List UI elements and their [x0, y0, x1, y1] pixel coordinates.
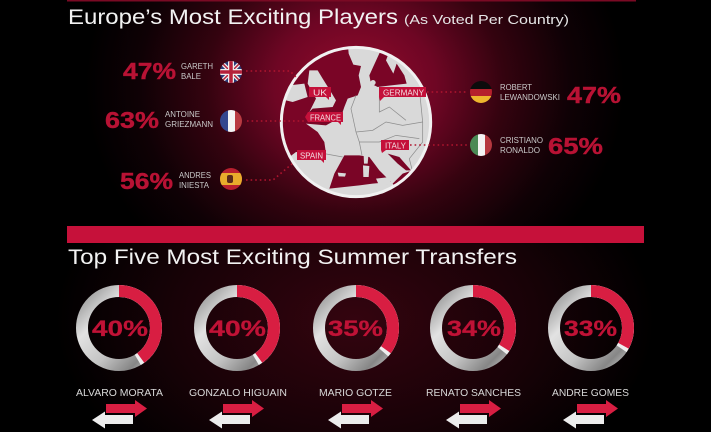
player: Antoine Griezmann: 63%	[105, 107, 159, 133]
donut: Andre Gomes 33%	[554, 291, 628, 365]
icon: Spain flag	[220, 168, 242, 190]
player: Robert Lewandowski: 47%	[567, 82, 621, 108]
donut: Mario Gotze 35%: 35%	[328, 316, 383, 341]
label: France: FRANCE	[310, 112, 341, 122]
arrows: transfer	[209, 400, 264, 428]
label: UK: UK	[313, 88, 327, 98]
label: UK	[309, 87, 331, 100]
title: Europe's most exciting players	[68, 6, 569, 29]
arrows: transfer	[328, 400, 383, 428]
donut: Alvaro Morata 40%	[82, 291, 156, 365]
donut: Gonzalo Higuain 40%	[200, 291, 274, 365]
title: top five transfers: Top Five Most Exciting Summer Transfers	[68, 246, 517, 269]
title: Europe's most exciting players: Europe’s Most Exciting Players	[68, 6, 398, 29]
connector lines	[246, 71, 468, 180]
player: Antoine Griezmann	[105, 107, 213, 133]
player: Antoine Griezmann: ANTOINE	[165, 110, 200, 119]
player: Cristiano Ronaldo: CRISTIANO	[500, 136, 543, 145]
player: Antoine Griezmann: GRIEZMANN	[165, 120, 213, 129]
player: Robert Lewandowski: LEWANDOWSKI	[500, 93, 560, 102]
background panel: bottom	[0, 243, 711, 432]
label: Germany: GERMANY	[383, 88, 424, 98]
top edge strip	[67, 0, 636, 2]
player: Cristiano Ronaldo	[500, 133, 603, 159]
player: Andres Iniesta: INIESTA	[179, 181, 210, 190]
icon: France flag	[220, 110, 242, 132]
label: Spain: SPAIN	[300, 150, 323, 160]
icon: Italy flag	[470, 134, 492, 156]
player: Cristiano Ronaldo: 65%	[548, 133, 603, 159]
donut: Andre Gomes 33%: 33%	[564, 316, 617, 341]
player: Gareth Bale: 47%	[123, 58, 176, 84]
label: Spain	[297, 150, 326, 163]
name: Andre Gomes: ANDRE GOMES	[552, 387, 629, 399]
name: Renato Sanches: RENATO SANCHES	[426, 387, 521, 399]
name: Gonzalo Higuain: GONZALO HIGUAIN	[189, 387, 287, 399]
player: Andres Iniesta: ANDRES	[179, 171, 211, 180]
player: Andres Iniesta	[120, 168, 211, 194]
player: Andres Iniesta: 56%	[120, 168, 173, 194]
label: Italy: ITALY	[385, 140, 406, 150]
label: Germany	[379, 87, 426, 101]
label: France	[305, 112, 343, 125]
donut: Alvaro Morata 40%: 40%	[92, 316, 148, 341]
donut: Renato Sanches 34%	[436, 291, 510, 365]
player: Gareth Bale	[123, 58, 213, 84]
arrows: transfer	[563, 400, 618, 428]
player: Gareth Bale: GARETH	[181, 62, 213, 71]
title: Europe's most exciting players: (As Voted Per Country)	[404, 12, 569, 27]
donut: Gonzalo Higuain 40%: 40%	[209, 316, 266, 341]
name: Alvaro Morata: ALVARO MORATA	[76, 387, 163, 399]
arrows: transfer	[446, 400, 501, 428]
name: Mario Gotze: MARIO GOTZE	[319, 387, 392, 399]
player: Robert Lewandowski: ROBERT	[500, 83, 532, 92]
donut: Renato Sanches 34%: 34%	[447, 316, 501, 341]
player: Gareth Bale: BALE	[181, 72, 201, 81]
arrows: transfer	[92, 400, 147, 428]
player: Robert Lewandowski	[500, 82, 621, 108]
red divider bar	[67, 226, 644, 243]
map of Europe	[276, 42, 436, 202]
icon: Germany flag	[470, 81, 492, 103]
icon: UK flag	[220, 61, 242, 83]
donut: Mario Gotze 35%	[319, 291, 393, 365]
player: Cristiano Ronaldo: RONALDO	[500, 146, 540, 155]
background panel: top	[0, 0, 711, 226]
label: Italy	[381, 140, 409, 153]
